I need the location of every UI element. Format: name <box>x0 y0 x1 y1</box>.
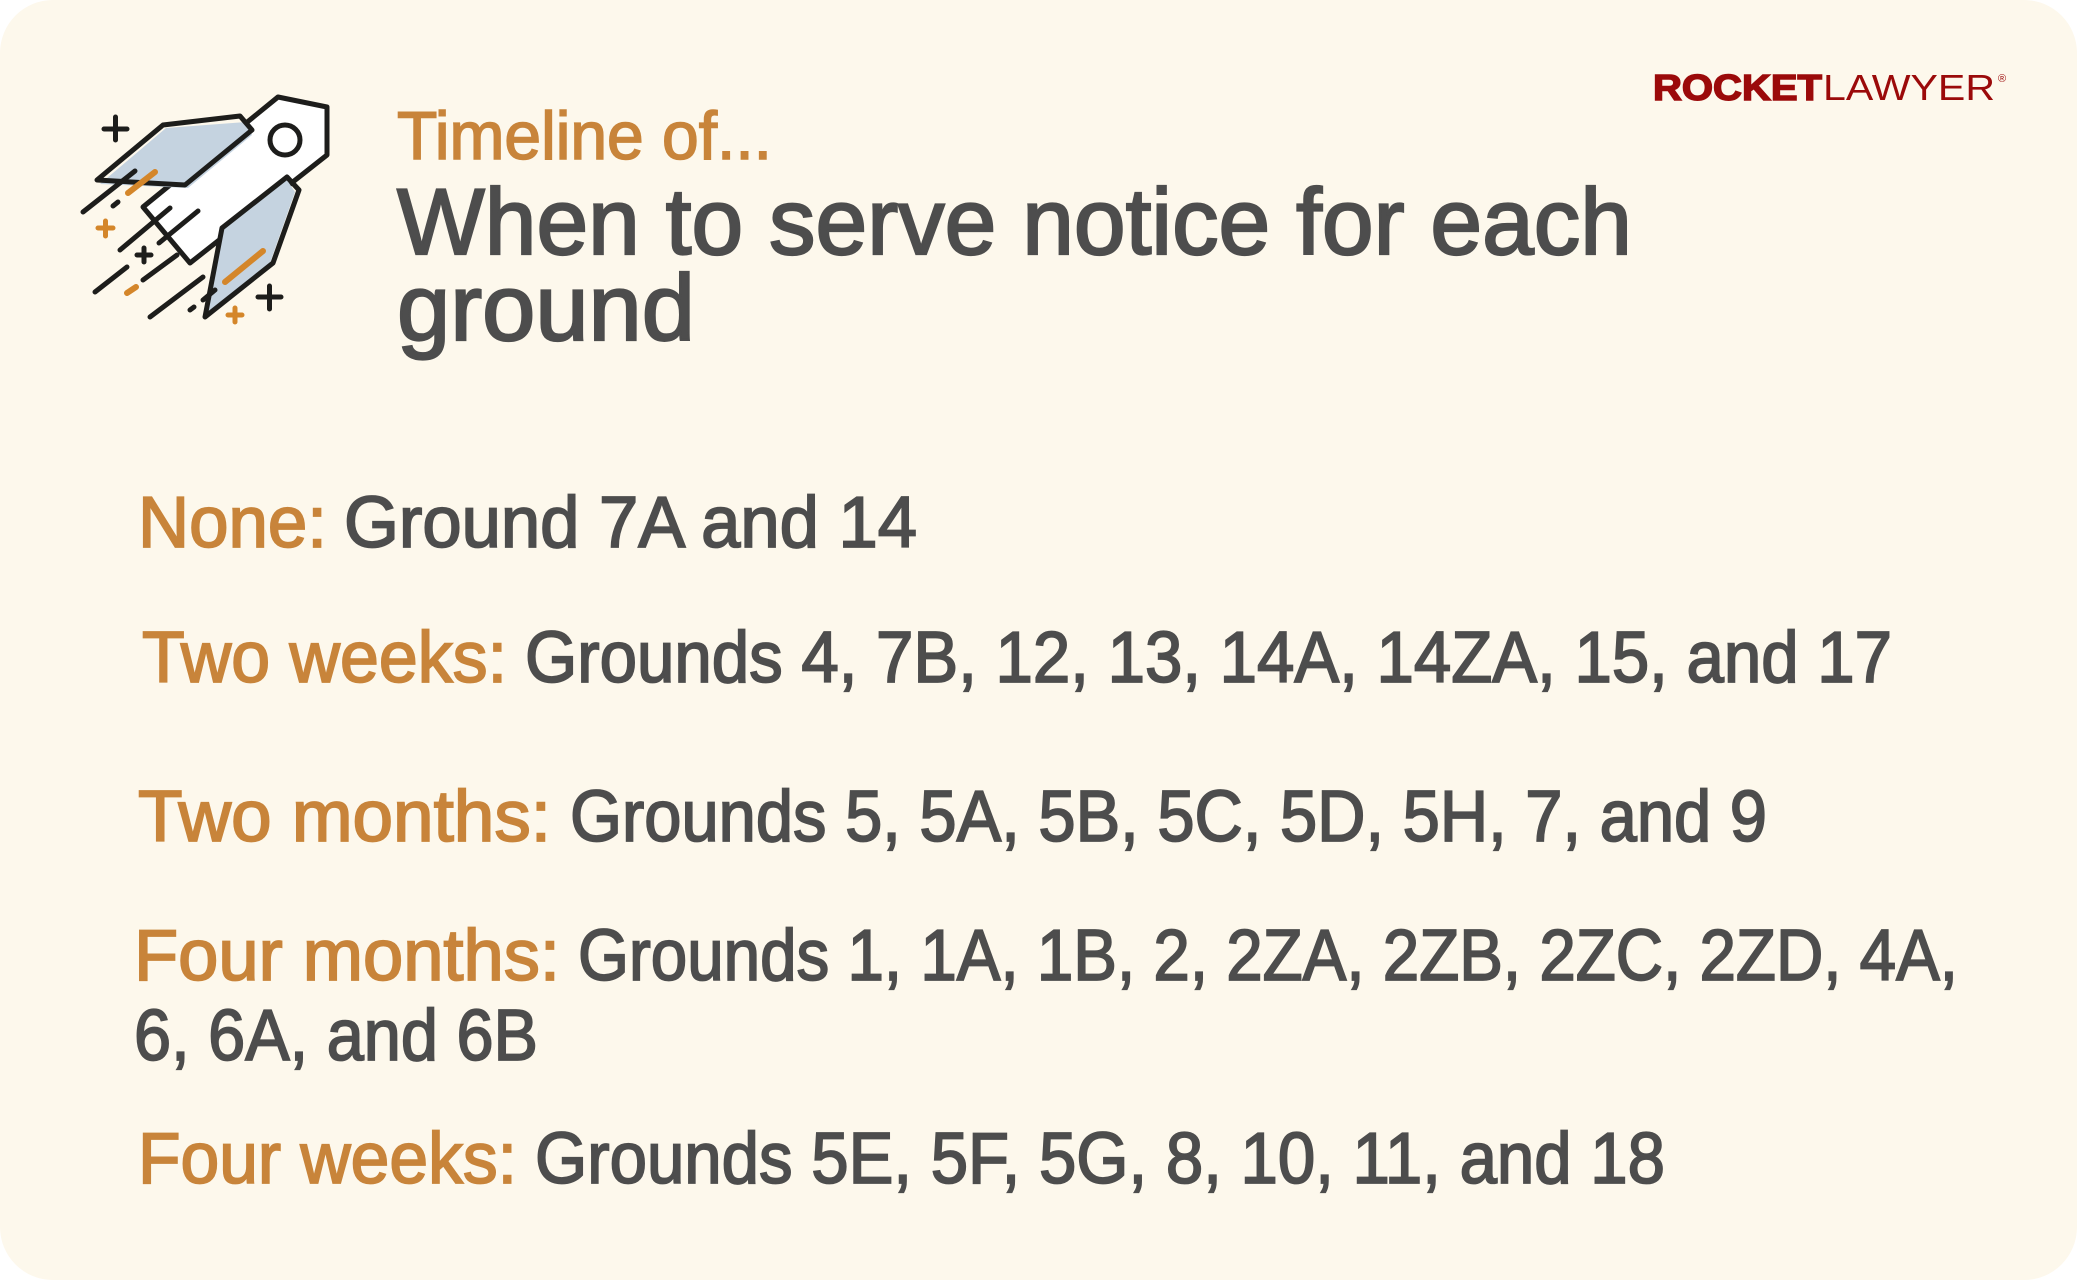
row: four weeks: Four weeks: <box>138 1119 517 1199</box>
logo: Rocket Lawyer: LAWYER <box>1823 67 1995 108</box>
row: four months: Four months: <box>134 916 560 996</box>
subtitle: Timeline of... <box>397 98 772 174</box>
title: When to serve notice for each <box>397 169 1632 274</box>
row: four weeks: Grounds 5E, 5F, 5G, 8, 10, 11, and 18 <box>535 1119 1665 1199</box>
row: two weeks: Grounds 4, 7B, 12, 13, 14A, 14ZA, 15, and 17 <box>525 618 1892 698</box>
row: none: None: <box>138 483 327 563</box>
row: two months: Two months: <box>138 777 551 857</box>
icon: rocket <box>83 97 327 322</box>
row: two months: Grounds 5, 5A, 5B, 5C, 5D, 5H, 7, and 9 <box>570 777 1767 857</box>
row: none: Ground 7A and 14 <box>344 483 917 563</box>
row: two weeks: Two weeks: <box>142 618 507 698</box>
row: two months <box>138 777 1767 857</box>
logo: Rocket Lawyer: ROCKET <box>1653 67 1822 108</box>
title <box>397 169 1632 360</box>
logo: Rocket Lawyer <box>1653 67 2006 108</box>
row: four months: 6, 6A, and 6B <box>134 996 538 1076</box>
title: ground <box>397 255 695 360</box>
row: four months <box>134 916 1958 1076</box>
logo: Rocket Lawyer: ® <box>1998 73 2006 85</box>
row: four months: Grounds 1, 1A, 1B, 2, 2ZA, 2ZB, 2ZC, 2ZD, 4A, <box>578 916 1958 996</box>
